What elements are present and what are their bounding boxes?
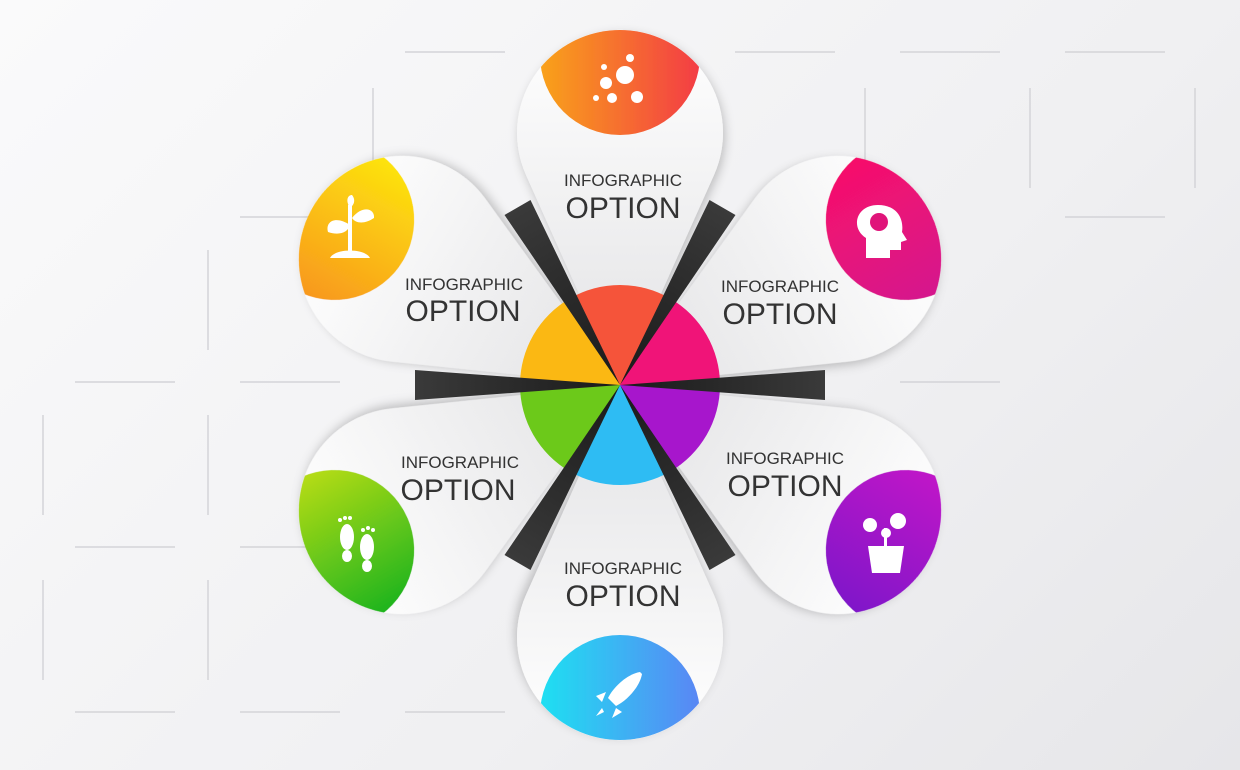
petal: lower left [296, 392, 564, 615]
text: upper left: INFOGRAPHIC [405, 275, 523, 294]
text: lower right [726, 449, 844, 503]
icon: bubbles [593, 54, 643, 103]
icon: flower pot [863, 513, 906, 573]
text: bottom [564, 559, 682, 613]
text: top: OPTION [565, 192, 681, 225]
text: upper left [405, 275, 523, 328]
text: lower left [400, 453, 519, 507]
text: bottom: INFOGRAPHIC [564, 559, 682, 578]
center colour wheel [520, 285, 720, 485]
petal: upper right [676, 155, 944, 378]
text: upper right: INFOGRAPHIC [721, 277, 839, 296]
text: lower left: OPTION [400, 474, 516, 507]
icon: brain head [857, 205, 907, 258]
background circuit lines [43, 52, 1195, 712]
spokes [415, 200, 825, 570]
icon: rocket [596, 672, 642, 718]
text: upper left: OPTION [405, 295, 521, 328]
text: lower left: INFOGRAPHIC [401, 453, 519, 472]
petal: lower right [676, 392, 942, 618]
text: bottom: OPTION [565, 580, 681, 613]
text: lower right: OPTION [727, 470, 843, 503]
text: top: INFOGRAPHIC [564, 171, 682, 190]
petal: bottom [510, 475, 726, 741]
icon: footprints [338, 516, 375, 572]
text: top [564, 171, 682, 225]
icon: plant [327, 195, 374, 258]
text: upper right [721, 277, 839, 331]
petal: upper left [298, 152, 564, 378]
petal: top [514, 29, 730, 295]
text: lower right: INFOGRAPHIC [726, 449, 844, 468]
text: upper right: OPTION [722, 298, 838, 331]
